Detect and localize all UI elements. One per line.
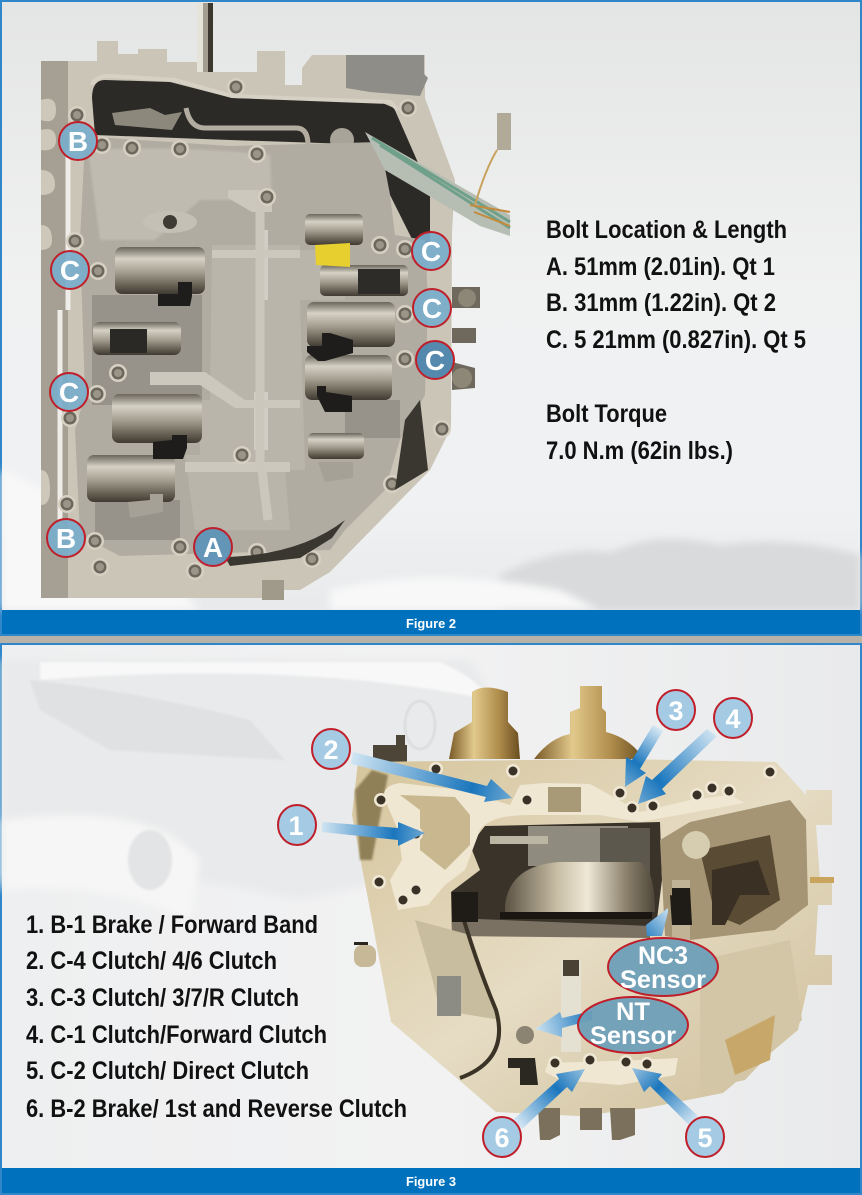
caption: figure 2: Figure 2 [406, 616, 456, 631]
text block: bolt location and length: Bolt Location & Length [546, 216, 787, 244]
callout: NT sensor: NT [616, 998, 650, 1026]
photo: valve body [41, 3, 511, 600]
grey connector [346, 55, 428, 96]
lower cavity shapes [415, 920, 500, 1020]
right pipe [810, 877, 834, 883]
photo: transmission case [352, 686, 834, 1140]
marker: C right lower: C [425, 345, 445, 376]
panel: figure 3 background [0, 643, 862, 1195]
callout: NT sensor [578, 997, 688, 1053]
text block: bolt location and length: B. 31mm (1.22in). Qt 2 [546, 289, 776, 317]
callout: NT sensor: Sensor [590, 1022, 676, 1050]
text block: bolt torque: Bolt Torque [546, 400, 667, 428]
text block: clutch and brake list: 5. C-2 Clutch/ Direct Clutch [26, 1057, 309, 1085]
connectors [110, 329, 147, 353]
marker: C right lower [416, 341, 454, 379]
wiring harness [365, 113, 511, 236]
text block: clutch and brake list: 3. C-3 Clutch/ 3/7/R Clutch [26, 984, 299, 1012]
marker: C right middle [413, 289, 451, 327]
text block: clutch and brake list: 4. C-1 Clutch/Forward Clutch [26, 1021, 327, 1049]
clutch drum [505, 862, 655, 912]
callout: NC3 sensor [608, 938, 718, 996]
dark cavity [92, 80, 430, 245]
marker: A: A [203, 532, 223, 563]
casing outline [41, 41, 455, 598]
bottom bolts [538, 1108, 635, 1140]
marker: C left upper [51, 251, 89, 289]
yellow plug [315, 243, 350, 267]
arrow NT sensor [535, 1011, 592, 1037]
left port stub [354, 945, 376, 967]
arrow 1 [322, 822, 425, 846]
text block: bolt torque [546, 400, 733, 465]
central tunnel [451, 822, 662, 935]
gap strip between panels [0, 636, 862, 643]
arrow 6 [513, 1069, 585, 1129]
sensor plugs [672, 888, 692, 925]
text block: bolt torque: 7.0 N.m (62in lbs.) [546, 437, 733, 465]
marker: 3: 3 [668, 696, 684, 726]
solenoids [115, 247, 205, 294]
marker: 5: 5 [697, 1123, 713, 1153]
textured lower areas [92, 295, 202, 405]
marker: 6 [483, 1117, 521, 1157]
dark wire [458, 900, 499, 1078]
caption: figure 3: Figure 3 [406, 1174, 456, 1189]
case [352, 759, 832, 1116]
marker: C left upper: C [60, 255, 80, 286]
marker: 2 [312, 729, 350, 769]
marker: C right top: C [421, 236, 441, 267]
marker: C left lower [50, 373, 88, 411]
marker: 4: 4 [725, 704, 741, 734]
marker: C left lower: C [59, 377, 79, 408]
arrow NC3 sensor [646, 908, 668, 936]
marker: 2: 2 [323, 735, 339, 765]
marker: B bottom: B [56, 523, 76, 554]
dark lower right edge [395, 400, 428, 490]
callout: NC3 sensor: Sensor [620, 966, 706, 994]
callout: NC3 sensor: NC3 [638, 942, 688, 970]
text block: clutch and brake list: 1. B-1 Brake / Forward Band [26, 911, 318, 939]
holes [520, 793, 534, 807]
text block: clutch and brake list: 6. B-2 Brake/ 1st and Reverse Clutch [26, 1095, 407, 1123]
text block: bolt location and length: C. 5 21mm (0.827in). Qt 5 [546, 326, 806, 354]
marker: 5 [686, 1117, 724, 1157]
lower gasket [545, 1058, 678, 1085]
text block: clutch and brake list [26, 911, 407, 1123]
bottom stub [262, 580, 284, 600]
marker: 3 [657, 690, 695, 730]
rod at top [197, 3, 213, 73]
panel: figure 2 background [0, 0, 862, 636]
right side studs [452, 287, 480, 390]
arrow 5 [632, 1068, 698, 1125]
bolts [68, 106, 86, 124]
marker: 6: 6 [494, 1123, 510, 1153]
text block: bolt location and length: A. 51mm (2.01in). Qt 1 [546, 253, 775, 281]
right cavity [660, 800, 808, 940]
shafts [449, 688, 520, 759]
text block: bolt location and length [546, 216, 806, 354]
marker: C right middle: C [422, 293, 442, 324]
marker: A [194, 528, 232, 566]
arrow 3 [625, 725, 663, 787]
central body [185, 245, 345, 530]
marker: B top [59, 122, 97, 160]
arrow 2 [351, 752, 512, 802]
text block: clutch and brake list: 2. C-4 Clutch/ 4/6 Clutch [26, 947, 277, 975]
marker: C right top [412, 232, 450, 270]
top gasket channel [384, 783, 745, 910]
valve body [75, 138, 428, 556]
left textured strip [41, 61, 68, 598]
marker: 1 [278, 805, 316, 845]
marker: B bottom [47, 519, 85, 557]
dark cavity upper left shade [355, 770, 388, 860]
marker: B top: B [68, 126, 88, 157]
marker: 4 [714, 698, 752, 738]
arrow 4 [638, 729, 717, 804]
marker: 1: 1 [288, 811, 304, 841]
